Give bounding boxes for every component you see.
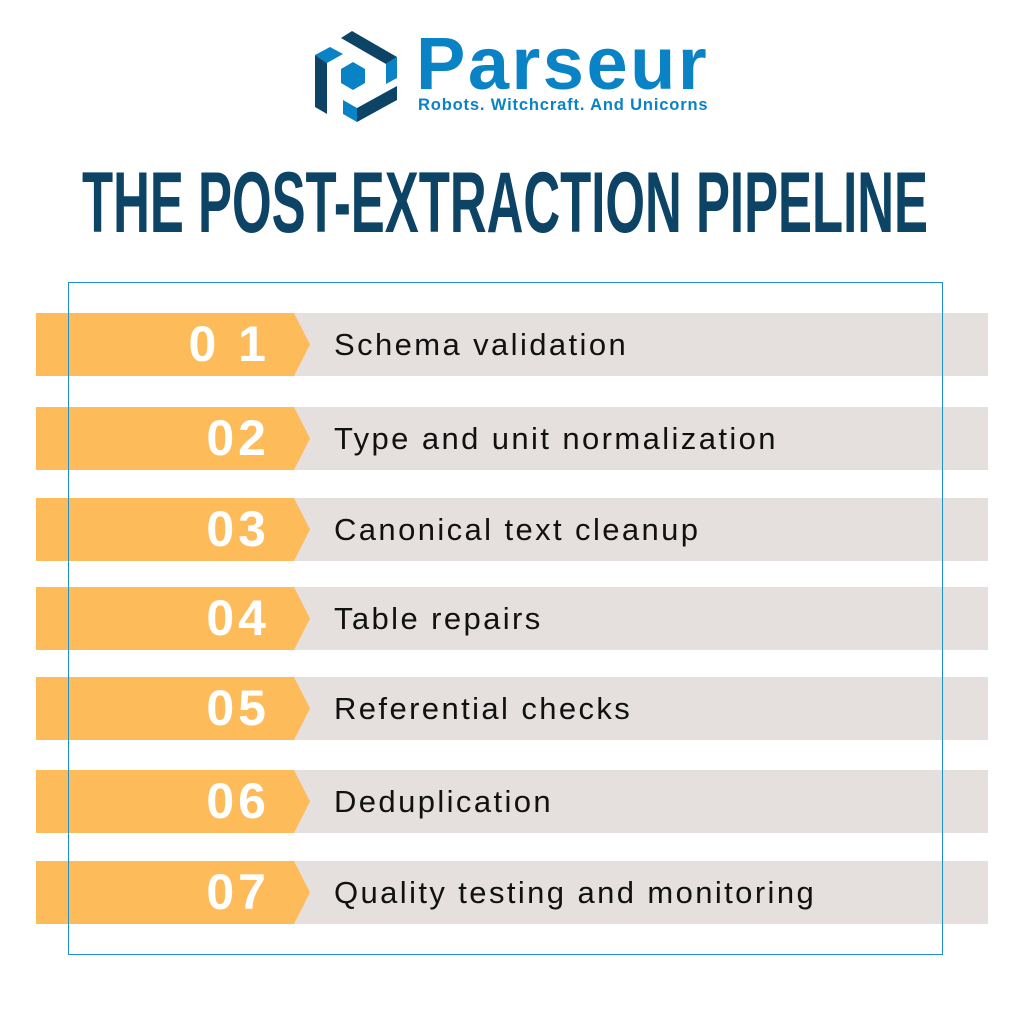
- row 06: Deduplication: [334, 784, 553, 819]
- row 01: Schema validation: [334, 327, 628, 362]
- row 03: [36, 498, 988, 561]
- row 03: 03: [206, 501, 270, 557]
- row 01: [36, 313, 988, 376]
- row 03: Canonical text cleanup: [334, 512, 700, 547]
- row 07: Quality testing and monitoring: [334, 875, 816, 910]
- list rows: [36, 313, 988, 924]
- row 04: Table repairs: [334, 601, 543, 636]
- logo wordmark: Parseur: [416, 22, 709, 105]
- row 07: 07: [206, 864, 270, 920]
- row 04: 04: [206, 590, 270, 646]
- icon: parseur cube: [315, 31, 397, 122]
- row 05: 05: [206, 680, 270, 736]
- row 06: [36, 770, 988, 833]
- row 04: [36, 587, 988, 650]
- row 05: [36, 677, 988, 740]
- tagline: Robots. Witchcraft. And Unicorns: [418, 96, 708, 114]
- row 07: [36, 861, 988, 924]
- row 06: 06: [206, 773, 270, 829]
- row 05: Referential checks: [334, 691, 632, 726]
- row 02: Type and unit normalization: [334, 421, 778, 456]
- row 01: 0 1: [188, 316, 270, 372]
- row 02: [36, 407, 988, 470]
- row 02: 02: [206, 410, 270, 466]
- logo: [315, 22, 709, 122]
- frame border: [68, 282, 943, 955]
